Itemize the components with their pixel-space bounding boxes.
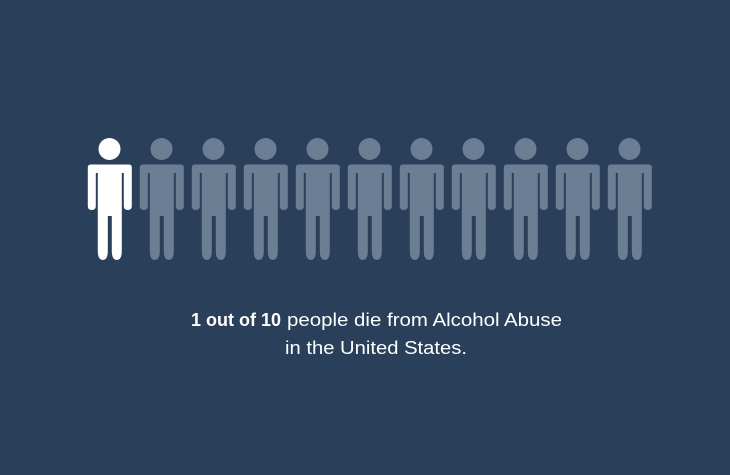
caption text xyxy=(191,310,562,358)
icon: muted people group xyxy=(140,138,652,260)
caption text: people die from Alcohol Abuse xyxy=(287,310,562,330)
caption text: 1 out of 10 xyxy=(191,310,281,330)
icon: highlighted person xyxy=(88,138,132,260)
caption text: in the United States. xyxy=(285,338,467,358)
pictogram row: 1 of 11 highlighted xyxy=(88,138,652,260)
